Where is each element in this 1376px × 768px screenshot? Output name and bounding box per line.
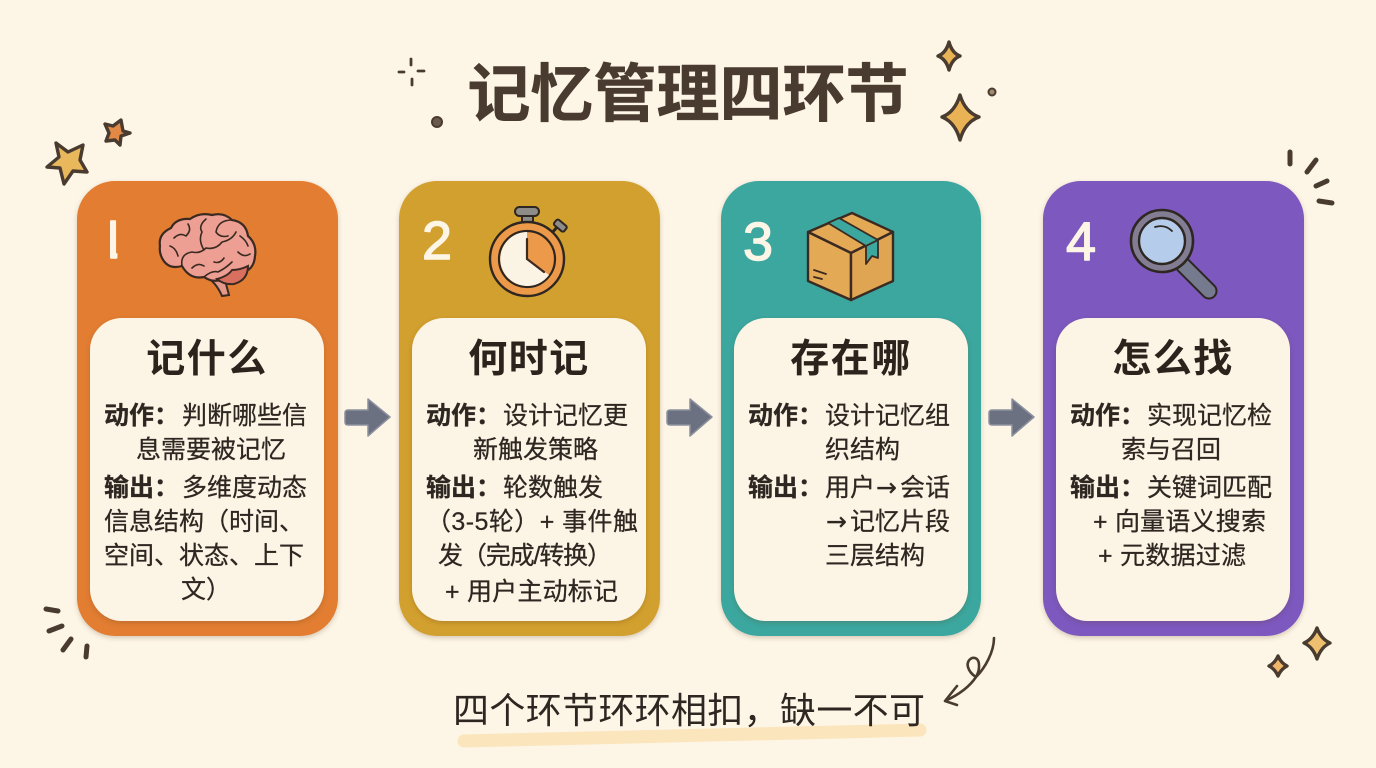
decoration: bottom-right sparkles	[1269, 628, 1330, 676]
step number 4: 4	[1066, 212, 1096, 272]
card text: 轮数触发	[503, 474, 603, 502]
card text: 输出：	[748, 474, 823, 502]
footer note: 四个环节环环相扣，缺一不可	[453, 690, 925, 731]
card text: + 元数据过滤	[1098, 542, 1246, 570]
card text: 空间、状态、上下	[104, 542, 304, 570]
decoration: title sparks	[399, 42, 996, 140]
card text: 输出：	[104, 474, 179, 502]
arrow: curved pointer to footer	[945, 638, 994, 705]
arrow: step 1 to 2	[345, 399, 390, 436]
card text	[426, 402, 638, 606]
card text: 输出：	[426, 474, 501, 502]
arrow: step 2 to 3	[667, 399, 712, 436]
icon: cardboard box	[808, 213, 893, 300]
card text	[748, 402, 950, 570]
step number 1: 1	[97, 210, 127, 270]
card heading: 记什么	[146, 338, 268, 381]
panel: step 4 怎么找	[1043, 181, 1304, 636]
card text	[104, 402, 307, 604]
card text: 用户	[825, 474, 875, 502]
icon: magnifying glass	[1131, 210, 1209, 291]
card text: →	[876, 473, 897, 502]
card text	[1070, 402, 1272, 570]
card text: 实现记忆检	[1147, 402, 1272, 430]
icon: stopwatch	[490, 207, 568, 296]
content card	[734, 318, 968, 621]
decoration: top-left stars	[47, 120, 130, 184]
content card	[1056, 318, 1290, 621]
panel: step 2 何时记	[399, 181, 660, 636]
card text: 设计记忆组	[825, 402, 950, 430]
card text: 织结构	[825, 436, 900, 464]
icon: brain	[160, 214, 255, 296]
card text: 文）	[181, 576, 231, 604]
step number 3: 3	[743, 212, 773, 272]
card text: 动作：	[748, 402, 823, 430]
card text: 关键词匹配	[1147, 474, 1272, 502]
card text: 动作：	[104, 402, 179, 430]
card text: + 向量语义搜索	[1093, 508, 1266, 536]
card text: 输出：	[1070, 474, 1145, 502]
card text: 索与召回	[1121, 436, 1221, 464]
card heading: 存在哪	[790, 338, 912, 381]
step number 2: 2	[422, 211, 452, 271]
card text: 新触发策略	[473, 436, 598, 464]
card text: 动作：	[1070, 402, 1145, 430]
decoration: top-right ticks	[1290, 152, 1332, 203]
card text: 设计记忆更	[503, 402, 628, 430]
card text: →	[826, 507, 847, 536]
card text: 息需要被记忆	[136, 436, 286, 464]
panel: step 3 存在哪	[721, 181, 981, 636]
panel: step 1 记什么	[77, 181, 338, 636]
card heading: 怎么找	[1112, 338, 1234, 381]
content card	[90, 318, 324, 621]
card heading: 何时记	[468, 338, 590, 381]
card text: （3-5轮）+ 事件触	[426, 508, 638, 536]
card text: 三层结构	[825, 542, 925, 570]
highlight under footer	[464, 730, 920, 741]
card text: 发（完成/转换）	[438, 542, 612, 570]
card text: 动作：	[426, 402, 501, 430]
card text: 判断哪些信	[182, 402, 307, 430]
card text: + 用户主动标记	[445, 578, 618, 606]
card text: 会话	[900, 474, 950, 502]
content card	[412, 318, 646, 621]
title: 记忆管理四环节	[468, 60, 908, 130]
arrow: step 3 to 4	[989, 399, 1034, 436]
card text: 多维度动态	[182, 474, 307, 502]
card text: 记忆片段	[850, 508, 950, 536]
card text: 信息结构（时间、	[104, 508, 304, 536]
decoration: bottom-left ticks	[46, 609, 87, 657]
